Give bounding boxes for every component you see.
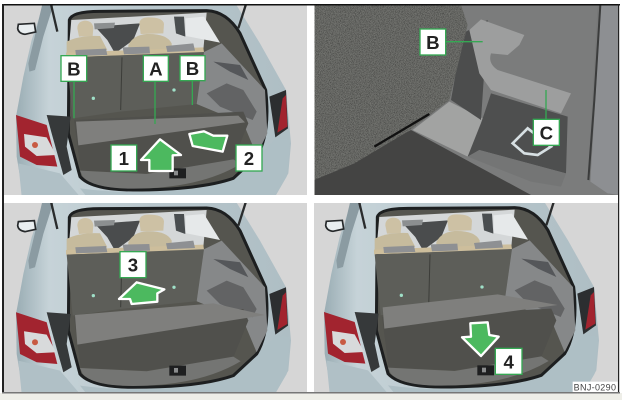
label A xyxy=(143,56,168,81)
label A: A xyxy=(149,58,163,79)
luggage cover xyxy=(75,303,265,345)
luggage cover xyxy=(383,294,558,329)
panel: step 4, lower cover xyxy=(314,197,618,394)
label 2: 2 xyxy=(244,148,254,169)
label C: C xyxy=(540,122,553,143)
car boot photo with cover at rear xyxy=(16,0,291,197)
label B left xyxy=(61,56,87,81)
arrow 1: up xyxy=(141,139,181,171)
panel: step 1 and 2, lift cover xyxy=(4,0,307,197)
carpet texture xyxy=(314,5,471,182)
label 1: 1 xyxy=(119,148,129,169)
label 3 xyxy=(120,252,146,278)
luggage cover A xyxy=(76,116,245,145)
label 2 xyxy=(236,145,262,171)
leader line B xyxy=(446,41,483,42)
rear seat back carpet xyxy=(314,5,468,180)
label 4: 4 xyxy=(503,351,514,372)
label B xyxy=(420,29,446,55)
lower ledge xyxy=(468,150,566,187)
label 4 xyxy=(495,348,522,374)
gap shadow xyxy=(451,20,488,120)
panel: close-up of hooks B and C xyxy=(314,5,619,195)
side trim wall xyxy=(411,5,611,195)
light floor plate xyxy=(413,102,483,157)
leader line C xyxy=(545,90,547,119)
leader line B left xyxy=(73,82,75,118)
leader line A xyxy=(154,82,156,124)
hook B xyxy=(469,19,571,113)
page background strip xyxy=(0,393,622,400)
metal loop xyxy=(513,128,551,155)
arrow 2: tilt xyxy=(189,131,227,152)
label 1 xyxy=(111,145,137,171)
car boot photo xyxy=(324,197,599,394)
right lighter trim xyxy=(590,5,619,195)
arrow 4 xyxy=(462,322,499,356)
label B right: B xyxy=(186,58,199,79)
label B right xyxy=(180,56,205,81)
car boot photo xyxy=(16,197,291,394)
arrow 3 xyxy=(119,282,164,304)
panel: step 3, slide cover forward xyxy=(4,197,307,394)
label C xyxy=(533,119,559,145)
seat edge line xyxy=(374,114,429,147)
label B: B xyxy=(426,32,440,53)
label B left: B xyxy=(67,58,81,79)
label 3: 3 xyxy=(128,255,138,276)
carpet floor xyxy=(314,130,531,195)
leader line B right xyxy=(192,81,193,105)
figure code: BNJ-0290 xyxy=(574,383,616,393)
recess under hook C xyxy=(468,93,568,173)
